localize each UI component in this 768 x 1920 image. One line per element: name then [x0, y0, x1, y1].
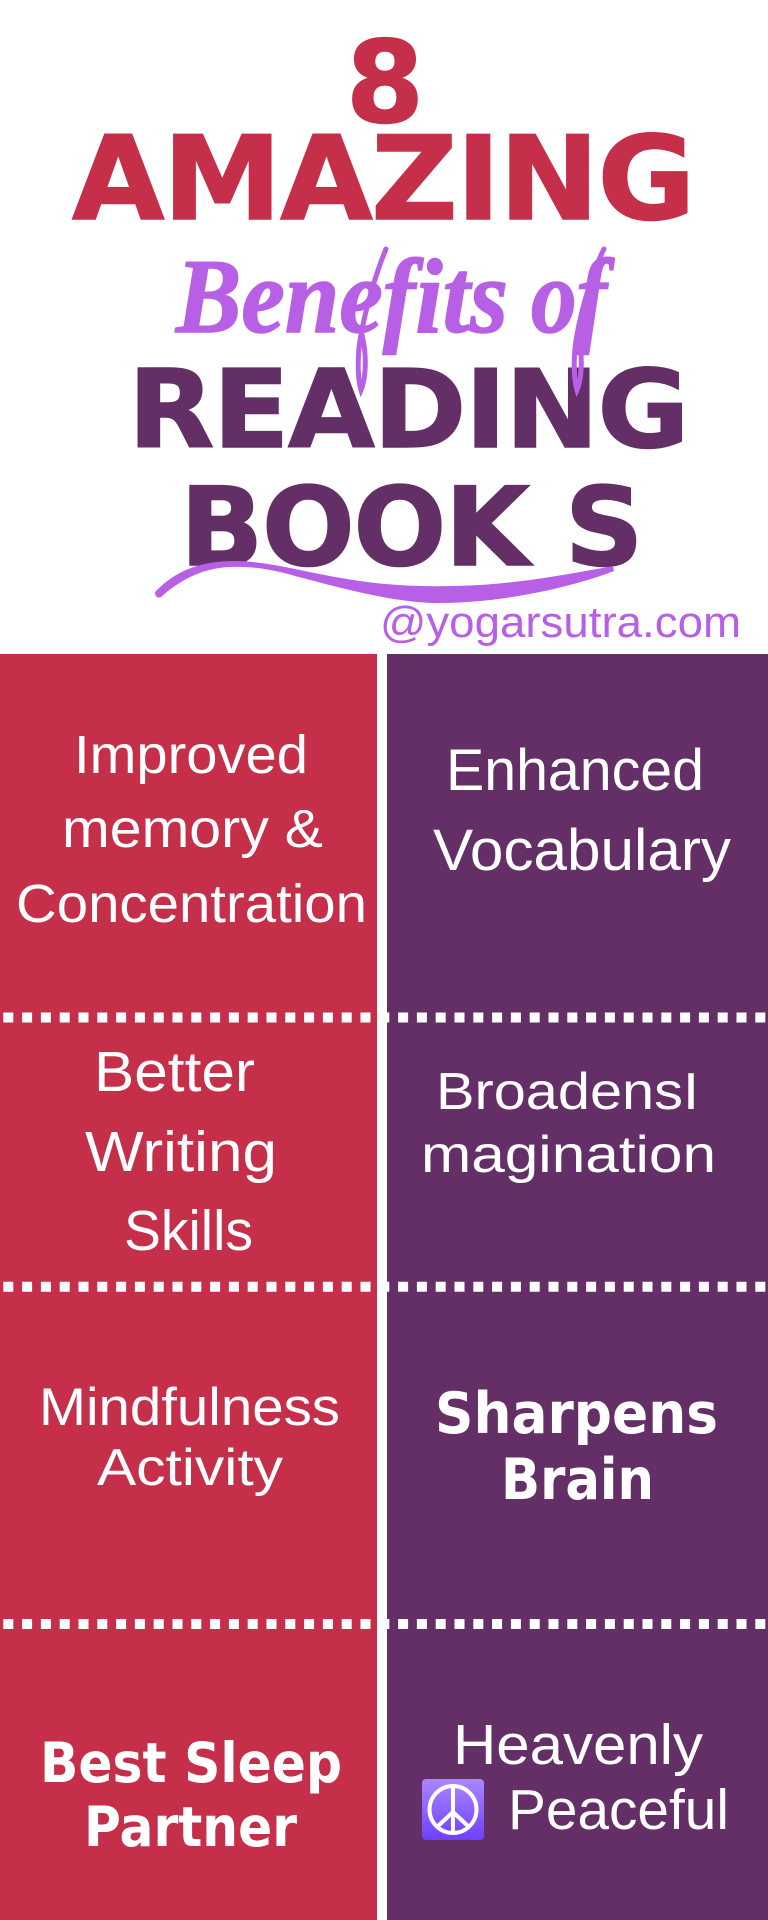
panel: Improved memory & Concentration [0, 654, 377, 1018]
panel: Sharpens Brain: Sharpens [435, 1381, 718, 1447]
heading: READING: READING [128, 348, 688, 473]
heading: 8: 8 [346, 17, 424, 149]
panel: Mindfulness Activity: Activity [97, 1439, 283, 1497]
panel: Broadens Imagination [387, 1018, 768, 1287]
panel: Improved memory & Concentration: memory & [62, 799, 323, 859]
panel: Enhanced Vocabulary: Vocabulary [433, 818, 731, 883]
icon: peace symbol [422, 1779, 484, 1840]
script heading: Benefits of [175, 238, 615, 390]
panel: Better Writing Skills: Better [94, 1040, 255, 1104]
panel: Broadens Imagination: magination [421, 1126, 716, 1184]
panel: Heavenly Peaceful: Heavenly [453, 1713, 704, 1777]
panel: Sharpens Brain: Brain [501, 1447, 654, 1513]
heading: BOOK S: BOOK S [180, 464, 642, 591]
swoosh underline [155, 561, 614, 603]
panel: Improved memory & Concentration: Improved [74, 725, 308, 785]
heading: AMAZING: AMAZING [72, 112, 694, 247]
script heading: Benefits of: of [531, 238, 615, 355]
panel: Best Sleep Partner: Best Sleep [40, 1731, 342, 1795]
panel: Best Sleep Partner [0, 1624, 377, 1920]
website handle: @yogarsutra.com [380, 598, 741, 647]
panel: Better Writing Skills [0, 1018, 377, 1287]
panel: Better Writing Skills: Writing [85, 1120, 277, 1184]
panel: Sharpens Brain [387, 1287, 768, 1624]
panel: Heavenly Peaceful [387, 1624, 768, 1920]
title [72, 17, 694, 603]
panel: Better Writing Skills: Skills [124, 1199, 253, 1263]
panel: Best Sleep Partner: Partner [84, 1795, 297, 1859]
panel: Mindfulness Activity: Mindfulness [39, 1378, 340, 1437]
panel: Mindfulness Activity [0, 1287, 377, 1624]
panel: Broadens Imagination: BroadensI [436, 1063, 699, 1121]
panel: Heavenly Peaceful: Peaceful [508, 1778, 729, 1842]
panel: Improved memory & Concentration: Concentration [16, 874, 367, 934]
script heading: Benefits of: Benefits [175, 238, 508, 355]
panel: Enhanced Vocabulary [387, 654, 768, 1018]
panel: Enhanced Vocabulary: Enhanced [446, 738, 704, 803]
